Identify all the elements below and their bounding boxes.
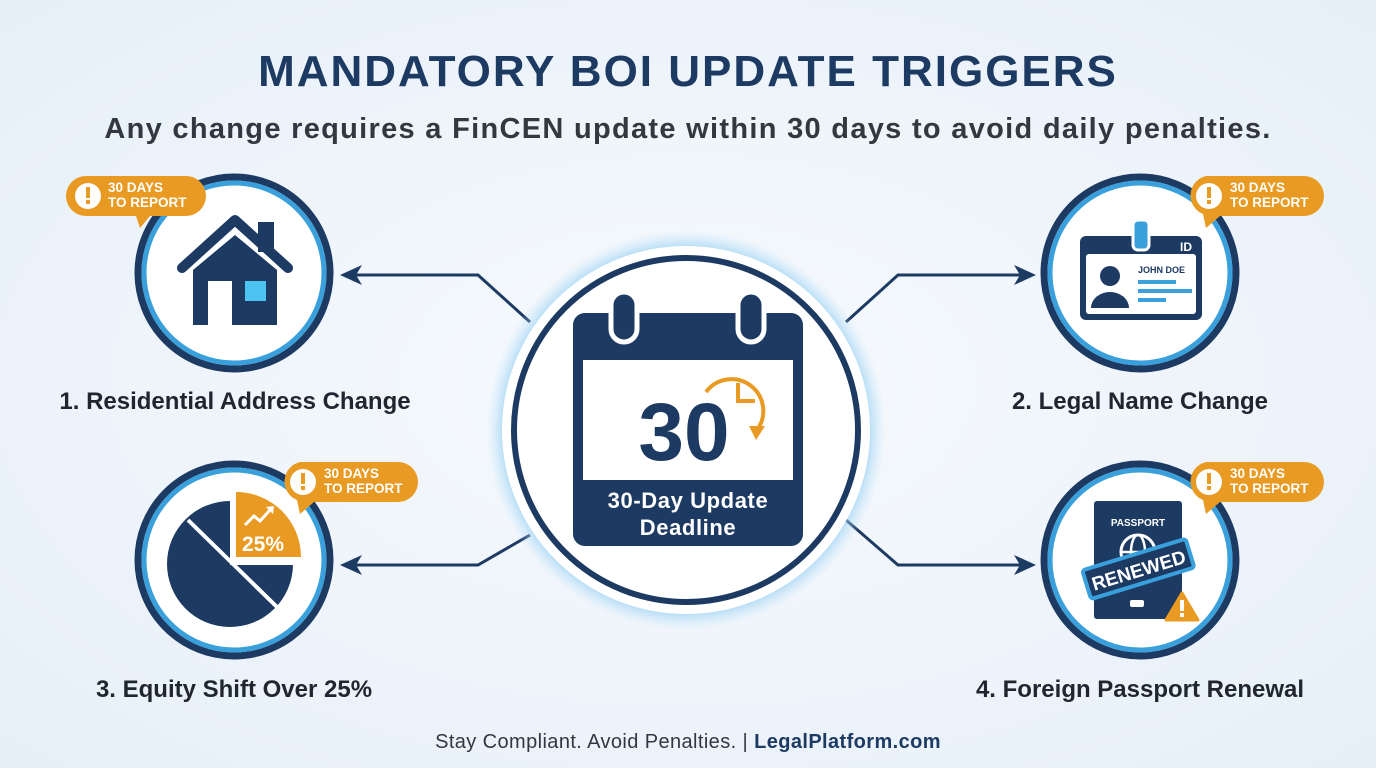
icon: house (182, 220, 288, 325)
badge: 30 DAYS (1230, 180, 1285, 195)
footer: Stay Compliant. Avoid Penalties. | LegalPlatform.com (435, 731, 941, 753)
badge (285, 462, 418, 514)
center: 30-day deadline calendar: Deadline (640, 515, 736, 540)
arrows (350, 275, 1025, 565)
icon: passport: RENEWED (1090, 547, 1189, 596)
badge: TO REPORT (324, 481, 403, 496)
badge (66, 176, 206, 228)
subtitle: Any change requires a FinCEN update within 30 days to avoid daily penalties. (104, 113, 1272, 145)
title: MANDATORY BOI UPDATE TRIGGERS (258, 47, 1118, 96)
panel: equity shift (96, 462, 418, 703)
label: 2. Legal Name Change (1012, 388, 1268, 415)
label: 4. Foreign Passport Renewal (976, 676, 1304, 703)
panel: residential address (59, 176, 411, 415)
label: 3. Equity Shift Over 25% (96, 676, 372, 703)
center: 30-day deadline calendar (486, 230, 886, 630)
icon: ID card (1080, 220, 1202, 320)
icon: pie chart: 25% (242, 533, 284, 556)
badge (1191, 176, 1324, 228)
panel: legal name (1012, 176, 1324, 415)
badge: 30 DAYS (324, 466, 379, 481)
icon: ID card: ID (1180, 240, 1192, 254)
badge: TO REPORT (1230, 195, 1309, 210)
icon: passport (1082, 501, 1198, 620)
label: 1. Residential Address Change (59, 388, 411, 415)
icon: passport: PASSPORT (1111, 518, 1165, 529)
badge: TO REPORT (108, 195, 187, 210)
center: 30-day deadline calendar: 30-Day Update (608, 488, 768, 513)
icon: pie chart (167, 492, 301, 627)
badge (1191, 462, 1324, 514)
badge: TO REPORT (1230, 481, 1309, 496)
center: 30-day deadline calendar: 30 (638, 387, 730, 478)
panel: passport renewal (976, 462, 1324, 703)
badge: 30 DAYS (108, 180, 163, 195)
icon: ID card: JOHN DOE (1138, 265, 1185, 275)
badge: 30 DAYS (1230, 466, 1285, 481)
